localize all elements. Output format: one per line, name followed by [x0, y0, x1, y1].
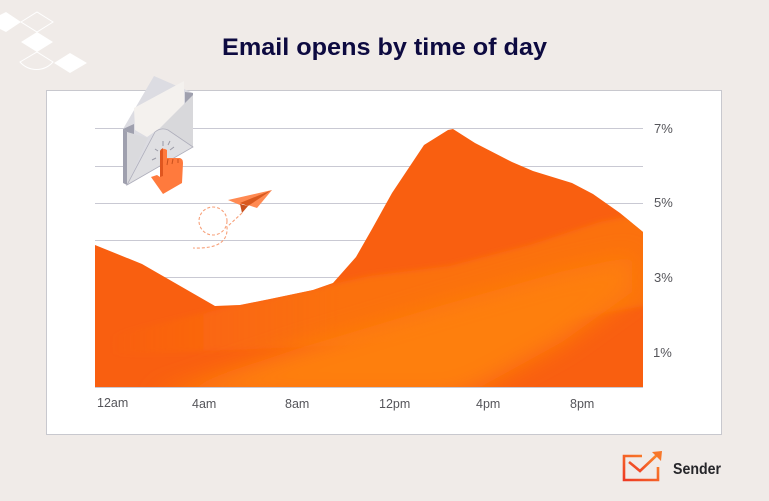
grid lines	[95, 128, 643, 388]
title: Email opens by time of day	[222, 34, 548, 61]
icon: paper airplane with dashed trail	[193, 190, 272, 248]
x axis labels: 8pm	[570, 397, 594, 411]
icon: envelope with pointing hand	[123, 76, 193, 194]
y axis labels: 7%	[654, 121, 673, 136]
x axis labels: 8am	[285, 397, 309, 411]
logo wordmark: Sender	[673, 461, 721, 478]
y axis labels: 5%	[654, 195, 673, 210]
x axis labels	[97, 396, 594, 411]
hand	[151, 149, 183, 194]
y axis labels: 1%	[653, 345, 672, 360]
x axis labels: 4pm	[476, 397, 500, 411]
letter	[134, 81, 184, 137]
x axis labels: 12am	[97, 396, 128, 410]
front flap	[127, 129, 193, 185]
left pane	[127, 132, 148, 185]
right pane	[160, 95, 193, 147]
decorative diamonds	[0, 12, 87, 73]
click marks	[152, 141, 174, 160]
x axis labels: 12pm	[379, 397, 410, 411]
back flap	[123, 76, 193, 185]
inner shadow	[185, 92, 193, 108]
logo icon	[624, 455, 658, 480]
logo: Sender	[624, 451, 721, 480]
y axis labels	[653, 121, 673, 360]
x axis labels: 4am	[192, 397, 216, 411]
area chart	[95, 129, 643, 387]
chart panel	[46, 90, 722, 434]
left side	[123, 129, 127, 185]
y axis labels: 3%	[654, 270, 673, 285]
